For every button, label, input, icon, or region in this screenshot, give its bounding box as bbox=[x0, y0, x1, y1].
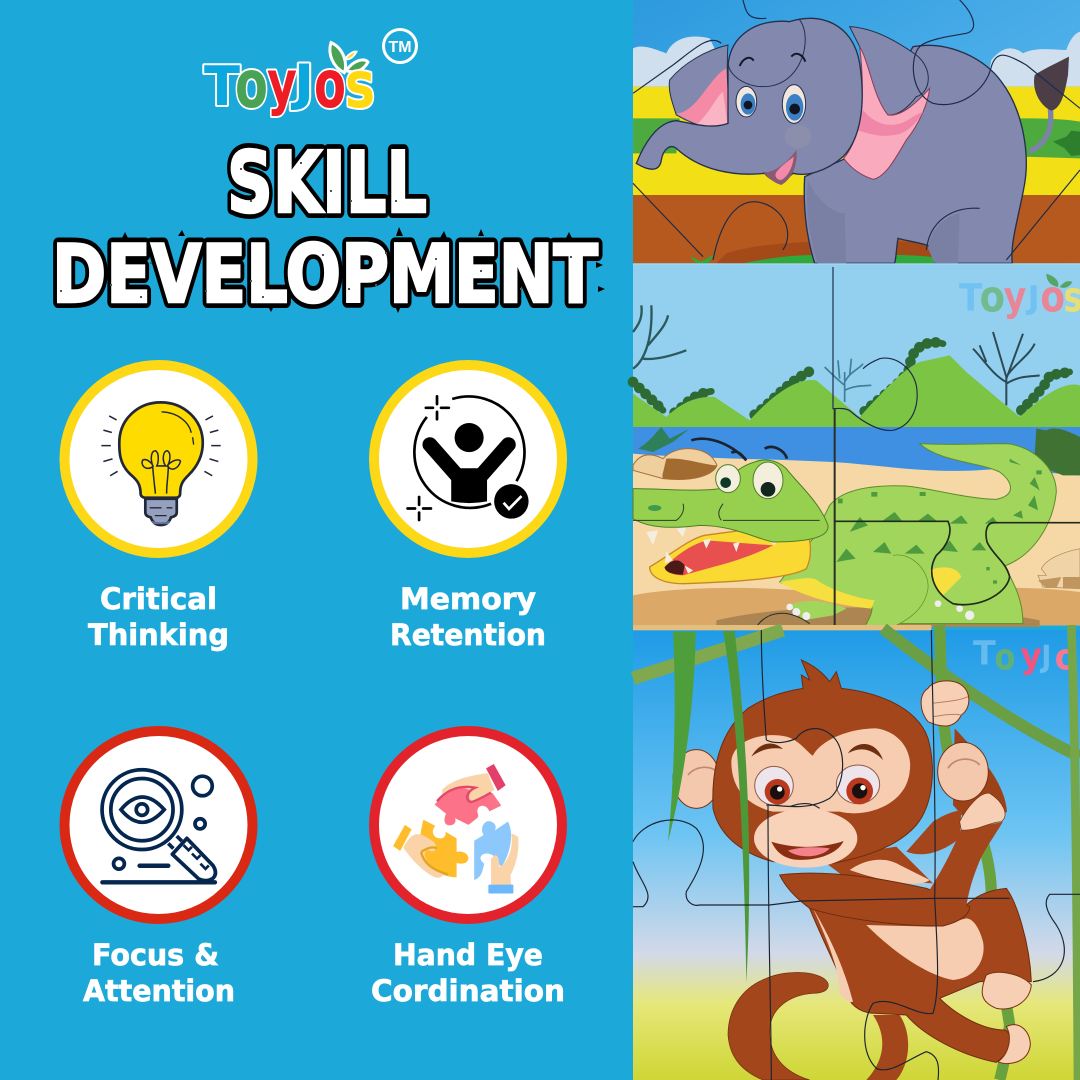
skill card: Hand Eye Cordination bbox=[371, 731, 565, 1008]
muzzle bbox=[754, 809, 857, 868]
skill card: Critical Thinking bbox=[64, 365, 252, 652]
icon: light bulb bbox=[101, 402, 221, 525]
faded logo: J bbox=[1026, 281, 1040, 317]
title: SKILL bbox=[227, 134, 427, 233]
puzzle photo: monkey bbox=[633, 625, 1080, 1080]
label: Focus & bbox=[92, 938, 219, 972]
skill card: Focus & Attention bbox=[64, 731, 252, 1008]
mouth bbox=[763, 150, 797, 185]
logo: Toyjos: s bbox=[345, 49, 375, 123]
title: DEVELOPMENT bbox=[52, 228, 598, 321]
icon: magnifier with eye bbox=[102, 770, 215, 882]
hill foliage shadows bbox=[633, 342, 1070, 415]
faded logo: T bbox=[959, 275, 983, 319]
feet bbox=[982, 972, 1031, 1009]
green hills bbox=[633, 355, 1080, 429]
logo: Toyjos: T bbox=[204, 55, 240, 118]
hanging leaves bbox=[668, 632, 696, 842]
background panel bbox=[0, 0, 633, 1080]
faded logo: y bbox=[1020, 637, 1042, 677]
river bbox=[633, 427, 1080, 475]
sand bbox=[633, 454, 1080, 625]
eyes and brows bbox=[716, 465, 740, 493]
title: SKILL bbox=[227, 134, 427, 233]
logo: Toyjos: o bbox=[235, 46, 268, 123]
badge ring red bbox=[64, 731, 252, 919]
icon: hands with puzzle pieces bbox=[393, 764, 518, 893]
faded logo: y bbox=[1004, 274, 1026, 320]
logo leaves bbox=[330, 43, 368, 73]
faded logo: T bbox=[973, 633, 996, 672]
title bbox=[52, 134, 605, 321]
logo: Toyjos: J bbox=[291, 54, 314, 112]
front leg and claws bbox=[790, 601, 846, 620]
left ear bbox=[669, 45, 728, 129]
crocodile body and tail bbox=[780, 444, 1056, 624]
face mask bbox=[731, 728, 910, 813]
logo: Toyjos bbox=[204, 30, 416, 123]
skill card: Critical Thinking: Thinking bbox=[88, 618, 229, 652]
trademark badge: TM bbox=[388, 39, 412, 56]
tail bbox=[1030, 108, 1051, 152]
eyes bbox=[736, 86, 757, 117]
faded logo: o bbox=[995, 635, 1015, 678]
bare trees bbox=[633, 305, 686, 369]
faded logo: o bbox=[1055, 635, 1078, 678]
puzzle photo: elephant bbox=[633, 0, 1080, 267]
skill card: Focus & Attention: Attention bbox=[83, 974, 235, 1008]
faded logo bbox=[959, 272, 1080, 322]
faded logo: J bbox=[1040, 640, 1051, 675]
badge ring yellow bbox=[374, 365, 562, 553]
brows bbox=[751, 743, 883, 760]
label: Hand Eye bbox=[393, 938, 543, 972]
panel edge bbox=[633, 263, 1080, 267]
logo: Toyjos: o bbox=[314, 46, 346, 123]
chest bbox=[813, 860, 984, 1002]
eyes bbox=[755, 766, 793, 805]
logo: Toyjos: y bbox=[267, 48, 297, 118]
badge ring yellow bbox=[64, 365, 252, 553]
shoulder under head bbox=[820, 847, 933, 883]
trademark badge bbox=[384, 30, 416, 62]
icon: raised arms person with check bbox=[408, 396, 529, 520]
body bbox=[810, 888, 1031, 1062]
croc scales bbox=[836, 459, 1040, 562]
arm across chest bbox=[780, 873, 970, 926]
jigsaw cut lines bbox=[633, 630, 1080, 1080]
elephant body bbox=[804, 45, 1026, 263]
rocks bbox=[633, 449, 717, 480]
title: DEVELOPMENT bbox=[52, 228, 598, 321]
vines bbox=[633, 630, 783, 678]
jigsaw cut lines bbox=[633, 0, 1080, 260]
right ear bbox=[850, 27, 928, 115]
skill card: Memory Retention: Retention bbox=[390, 618, 546, 652]
back arm and top hand bbox=[953, 728, 1007, 832]
belly bbox=[780, 567, 961, 609]
faded logo bbox=[973, 633, 1078, 678]
skill card: Hand Eye Cordination: Cordination bbox=[371, 974, 565, 1008]
skill card: Memory Retention bbox=[374, 365, 562, 652]
puzzle photo: crocodile bbox=[633, 265, 1080, 627]
faded logo: o bbox=[980, 272, 1005, 322]
head bbox=[713, 660, 932, 863]
jigsaw cut lines bbox=[833, 267, 917, 431]
label: Memory bbox=[400, 582, 536, 616]
label: Critical bbox=[100, 582, 217, 616]
lower jaw bbox=[650, 524, 810, 584]
ears bbox=[673, 750, 720, 808]
upper snout bbox=[633, 460, 828, 542]
mouth bbox=[771, 841, 844, 860]
badge ring red bbox=[374, 731, 562, 919]
tail bbox=[728, 972, 828, 1080]
head and trunk bbox=[636, 18, 862, 181]
faded logo: o bbox=[1040, 272, 1065, 322]
